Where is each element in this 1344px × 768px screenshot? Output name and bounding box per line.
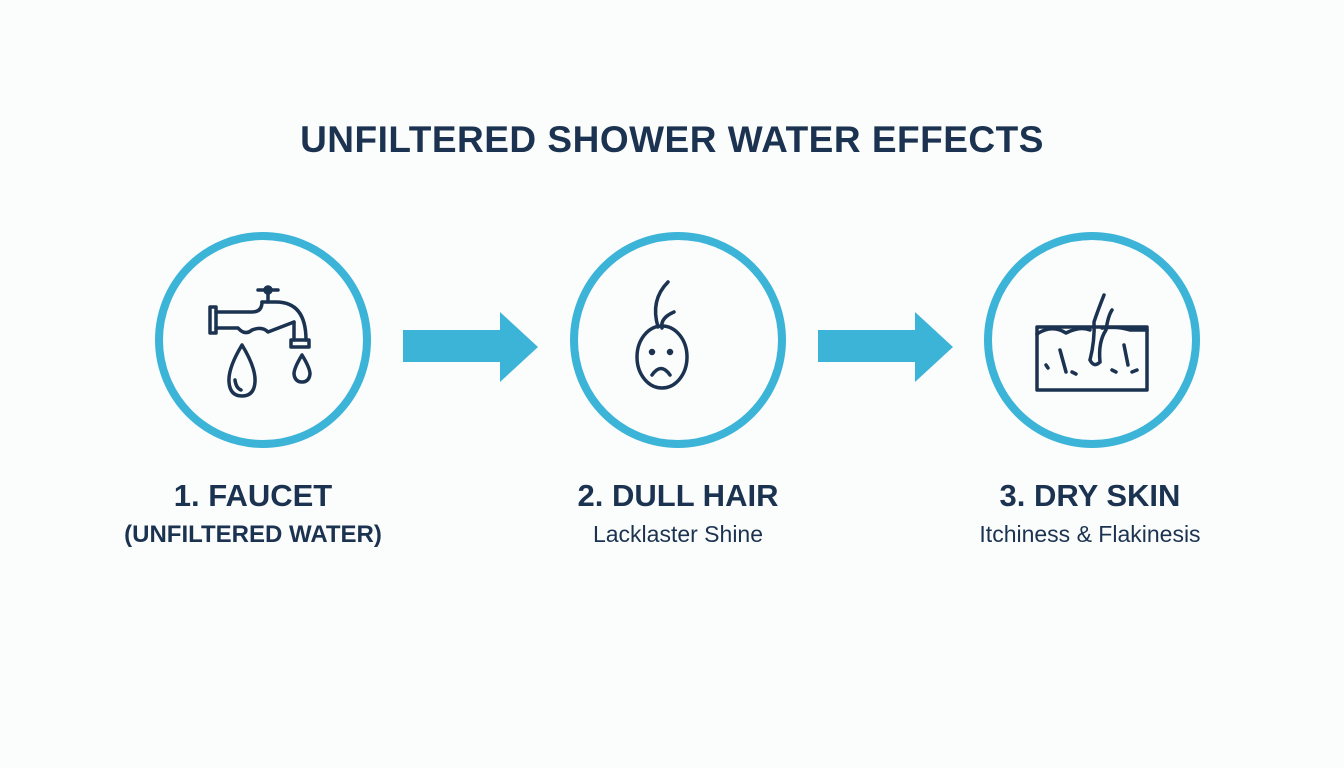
step 2 label: 2. DULL HAIR: [578, 478, 778, 513]
title: UNFILTERED SHOWER WATER EFFECTS: [300, 119, 1044, 160]
arrow 2: [818, 312, 953, 382]
step 3 label: 3. DRY SKIN: [1000, 478, 1180, 513]
arrow 1: [403, 312, 538, 382]
step 3 label: [979, 478, 1201, 547]
icon: faucet circle: [159, 236, 367, 444]
step 1 label: 1. FAUCET: [174, 478, 332, 513]
step 1 label: [124, 478, 382, 548]
icon: dry skin: [988, 236, 1196, 444]
step 3 label: Itchiness & Flakinesis: [979, 521, 1201, 547]
icon: dull hair face: [574, 236, 782, 444]
step 2 label: Lacklaster Shine: [593, 521, 763, 547]
step 2 label: [578, 478, 778, 547]
step 1 label: (UNFILTERED WATER): [124, 521, 382, 548]
